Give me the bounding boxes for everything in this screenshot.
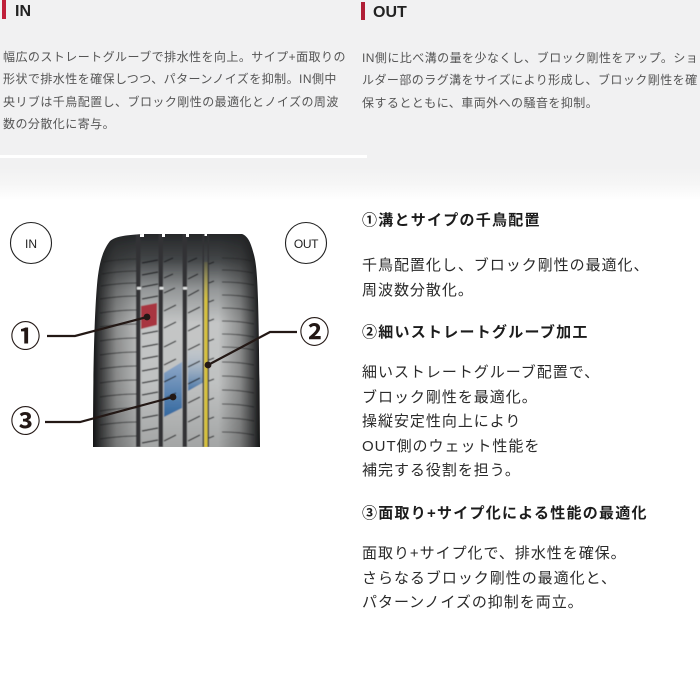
callout 3: ③ bbox=[10, 397, 40, 441]
IN description: 数の分散化に寄与。 bbox=[3, 117, 115, 131]
IN description bbox=[3, 50, 346, 131]
feature 2 text: OUT側のウェット性能を bbox=[362, 438, 540, 454]
callout 2: ② bbox=[300, 308, 330, 352]
feature 2 text: 細いストレートグルーブ配置で、 bbox=[362, 364, 600, 381]
divider bbox=[0, 155, 367, 158]
OUT description: 保するとともに、車両外への騒音を抑制。 bbox=[362, 96, 598, 110]
tread top notches bbox=[140, 234, 207, 237]
icon: IN circle bbox=[10, 222, 52, 264]
feature 3 text: さらなるブロック剛性の最適化と、 bbox=[362, 570, 617, 586]
feature 2 text: 補完する役割を担う。 bbox=[362, 462, 521, 479]
panel: OUT bbox=[361, 2, 698, 110]
feature 3 heading: ③面取り+サイプ化による性能の最適化 bbox=[362, 505, 648, 522]
feature 2 text: ブロック剛性を最適化。 bbox=[362, 388, 538, 406]
callout 2 bbox=[205, 308, 330, 368]
feature 3 text bbox=[362, 545, 627, 611]
icon: OUT circle bbox=[286, 222, 326, 264]
icon: OUT circle: OUT bbox=[294, 237, 319, 251]
shoulder sipes bbox=[100, 258, 254, 439]
IN heading: IN bbox=[15, 3, 31, 20]
feature 1 text: 周波数分散化。 bbox=[362, 282, 474, 298]
feature 2 text bbox=[362, 364, 600, 479]
OUT description: ルダー部のラグ溝をサイズにより形成し、ブロック剛性を確 bbox=[362, 73, 698, 87]
groove glints bbox=[137, 287, 187, 290]
highlight: groove 3 blue area bbox=[164, 350, 204, 417]
tread sipes bbox=[142, 258, 214, 443]
tire tread bbox=[90, 230, 265, 450]
tire diagram bbox=[10, 222, 330, 447]
highlight: yellow groove bbox=[204, 262, 208, 448]
feature 1 heading: ①溝とサイプの千鳥配置 bbox=[362, 212, 541, 229]
feature 2 heading: ②細いストレートグルーブ加工 bbox=[362, 324, 589, 341]
IN description: 形状で排水性を確保しつつ、パターンノイズを抑制。IN側中 bbox=[3, 72, 337, 86]
IN description: 央リブは千鳥配置し、ブロック剛性の最適化とノイズの周波 bbox=[3, 95, 339, 109]
panel: IN bbox=[2, 0, 346, 131]
OUT description: IN側に比べ溝の量を少なくし、ブロック剛性をアップ。ショ bbox=[362, 51, 698, 65]
feature 3 text: 面取り+サイプ化で、排水性を確保。 bbox=[362, 545, 627, 562]
tread rib shading bbox=[90, 230, 265, 450]
callout 1: ① bbox=[10, 312, 40, 356]
OUT heading: OUT bbox=[373, 4, 407, 21]
feature 2 text: 操縦安定性向上により bbox=[362, 413, 521, 430]
IN description: 幅広のストレートグルーブで排水性を向上。サイプ+面取りの bbox=[3, 50, 346, 64]
callout 3 bbox=[10, 394, 176, 441]
feature 1 text bbox=[362, 257, 649, 298]
IN heading marker bbox=[2, 0, 6, 19]
feature 3 text: パターンノイズの抑制を両立。 bbox=[362, 594, 584, 611]
OUT heading marker bbox=[361, 2, 365, 20]
OUT description bbox=[362, 51, 698, 110]
highlight: red block bbox=[141, 303, 157, 329]
icon: IN circle: IN bbox=[25, 237, 37, 251]
callout 1 bbox=[10, 312, 150, 356]
main grooves bbox=[136, 234, 209, 447]
feature 1 text: 千鳥配置化し、ブロック剛性の最適化、 bbox=[362, 257, 649, 274]
top band background bbox=[0, 0, 700, 200]
